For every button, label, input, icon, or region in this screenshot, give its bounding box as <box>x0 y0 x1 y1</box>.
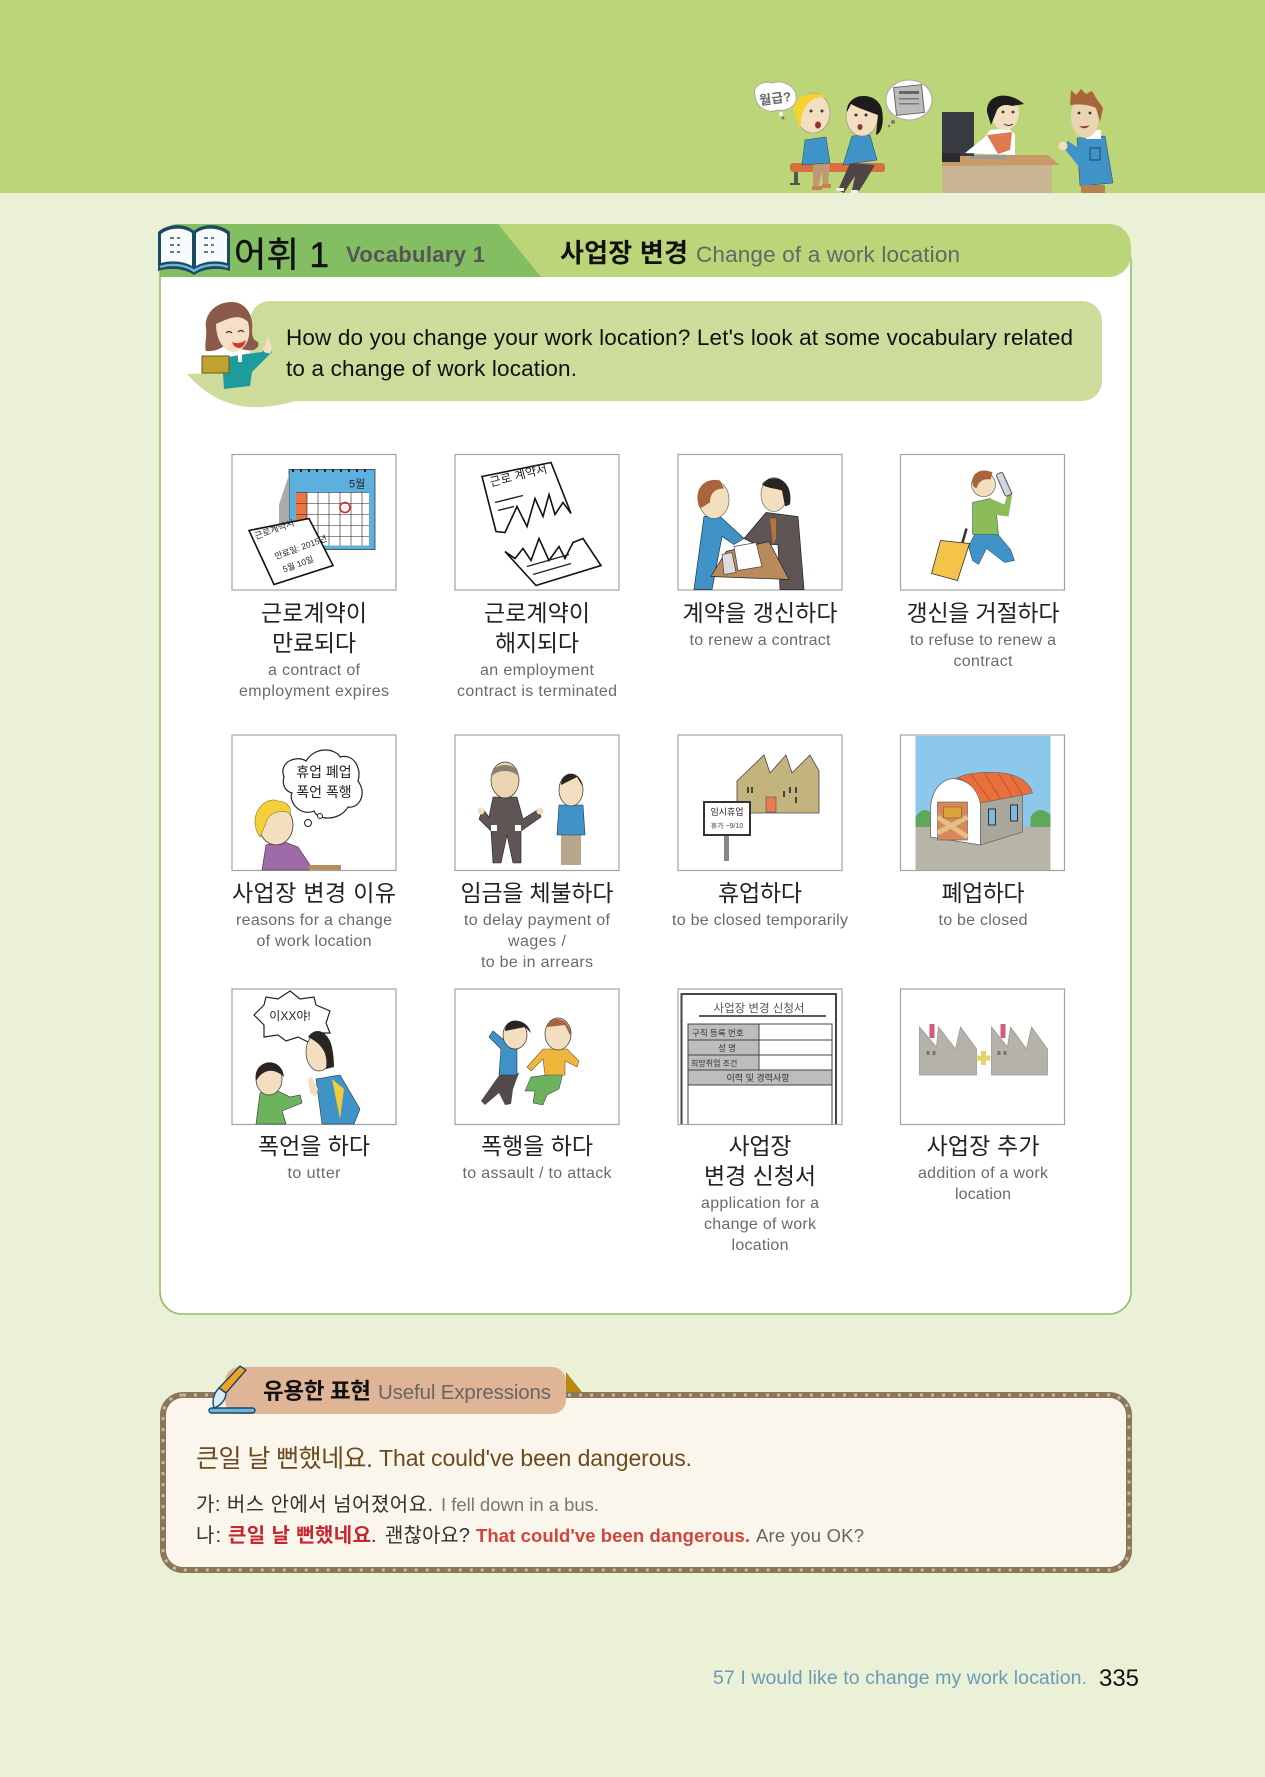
seated dark-haired worker <box>836 96 883 193</box>
dialogue line 2: 나: <box>196 1524 221 1547</box>
label <box>938 880 1028 929</box>
label: to delay payment of <box>464 912 611 929</box>
dialogue line 1: I fell down in a bus. <box>441 1494 599 1515</box>
label: 사업장 변경 이유 <box>232 880 396 906</box>
vocabulary item: delay wages <box>455 735 619 971</box>
label: 임금을 체불하다 <box>460 880 614 906</box>
picture: calendar and contract <box>232 454 396 590</box>
picture: fighting men <box>455 989 619 1124</box>
vocabulary item: renew contract <box>678 454 842 649</box>
picture: application form: 사업장 변경 신청서 <box>713 1001 805 1015</box>
vocabulary item: utter <box>232 989 396 1182</box>
picture: man thinking: 폭언 폭행 <box>296 784 352 800</box>
vocabulary item: contract expires <box>232 454 396 700</box>
tab title English: Useful Expressions <box>378 1381 551 1404</box>
label: 폭언을 하다 <box>258 1133 370 1159</box>
label: location <box>732 1237 788 1254</box>
dialogue line 2: 큰일 날 뻔했네요 <box>228 1524 371 1547</box>
picture: application form: 구직 등록 번호 <box>692 1028 744 1038</box>
label: application for a <box>701 1195 819 1212</box>
vocabulary item: addition of work location <box>900 989 1064 1203</box>
label <box>460 880 614 971</box>
speech bubble <box>187 301 1102 407</box>
seated blonde worker <box>794 93 831 190</box>
picture: man thinking <box>232 735 396 870</box>
page number: 335 <box>1099 1665 1139 1692</box>
heading: topic English: Change of a work location <box>696 242 960 267</box>
label: 근로계약이 <box>261 600 367 626</box>
picture: torn contract <box>455 454 619 590</box>
picture: application form <box>678 989 842 1124</box>
panel card <box>160 240 1131 1314</box>
label <box>672 880 848 929</box>
tab title Korean: 유용한 표현 <box>263 1379 371 1404</box>
vocabulary item: assault <box>455 989 619 1182</box>
icon: teacher <box>202 302 272 389</box>
label: 만료되다 <box>272 630 356 656</box>
picture: calendar and contract: 만료일: 2015년 <box>273 533 328 561</box>
vocabulary item: contract terminated <box>455 454 619 700</box>
panel: useful expressions <box>163 1366 1129 1570</box>
picture: torn contract: 근로 계약서 <box>488 461 549 489</box>
computer monitor <box>942 112 974 162</box>
heading: 어휘 1: 어휘 1 <box>234 236 329 275</box>
label <box>462 1133 612 1182</box>
receptionist <box>965 96 1024 155</box>
vocabulary item: reasons <box>232 735 396 950</box>
label: reasons for a change <box>236 912 392 929</box>
thought bubble: wages: 월급? <box>758 89 792 108</box>
picture: two factories and plus <box>900 989 1064 1124</box>
label: contract is terminated <box>457 683 617 700</box>
label: 계약을 갱신하다 <box>682 600 838 626</box>
picture: application form: 이력 및 경력사항 <box>727 1072 789 1083</box>
icon: open book <box>158 225 230 275</box>
label <box>258 1133 370 1182</box>
heading: topic Korean: 사업장 변경 <box>560 238 688 268</box>
heading bar <box>160 224 1131 277</box>
picture: boarded-up building <box>900 735 1064 870</box>
bubble text: How do you change your work location? Let's look at some vocabulary related <box>286 325 1073 350</box>
picture: calendar and contract: 5월 10일 <box>281 554 315 574</box>
label: 폭행을 하다 <box>481 1133 593 1159</box>
icon: paint brush <box>209 1366 255 1413</box>
picture: verbal abuse <box>232 989 396 1124</box>
label <box>701 1133 819 1254</box>
vocabulary item: closed <box>900 735 1064 929</box>
picture: verbal abuse: 이XX야! <box>269 1009 311 1023</box>
label <box>906 600 1060 670</box>
label: an employment <box>480 662 595 679</box>
male worker waving <box>1058 89 1113 193</box>
thought bubble: document <box>886 80 932 127</box>
label <box>682 600 838 649</box>
bubble text: to a change of work location. <box>286 356 577 381</box>
label <box>239 600 389 700</box>
picture: application form: 희망취업 조건 <box>691 1058 737 1068</box>
picture: calendar and contract: 5월 <box>349 478 365 490</box>
panel: vocabulary <box>158 224 1131 1314</box>
expression <box>196 1445 692 1473</box>
label: employment expires <box>239 683 389 700</box>
dialogue line 2: 괜찮아요? <box>385 1524 470 1547</box>
bubble text <box>286 325 1073 381</box>
illustration: workers at the employment center <box>755 80 1113 193</box>
heading: Vocabulary 1: Vocabulary 1 <box>346 242 485 267</box>
dialogue line 2: Are you OK? <box>756 1525 864 1546</box>
vocabulary item: application form <box>678 989 842 1254</box>
label: 휴업하다 <box>718 880 802 906</box>
label: wages / <box>507 933 567 950</box>
dialogue line 2: That could've been dangerous. <box>476 1525 750 1546</box>
label: a contract of <box>268 662 361 679</box>
dialogue line 1: 가: 버스 안에서 넘어졌어요. <box>196 1493 433 1516</box>
label: 근로계약이 <box>484 600 590 626</box>
label <box>457 600 617 700</box>
label: 사업장 <box>728 1133 792 1159</box>
label: to be in arrears <box>481 954 593 971</box>
label: 변경 신청서 <box>704 1163 816 1189</box>
tab <box>225 1367 566 1414</box>
picture: boss and worker <box>455 735 619 870</box>
tab fold <box>566 1372 582 1392</box>
picture: man thinking: 휴업 폐업 <box>296 764 352 780</box>
label: location <box>955 1186 1011 1203</box>
dialogue line 1 <box>196 1493 599 1516</box>
desk <box>942 155 1060 193</box>
picture: factory with sign: 임시휴업 <box>710 806 744 817</box>
label: to utter <box>288 1165 341 1182</box>
label: to assault / to attack <box>462 1165 612 1182</box>
dialogue line 2 <box>196 1524 864 1547</box>
expression: 큰일 날 뻔했네요. <box>196 1445 373 1473</box>
label <box>918 1133 1049 1203</box>
label: to renew a contract <box>690 632 831 649</box>
vocabulary item: closed temporarily <box>672 735 848 929</box>
vocabulary item: refuse to renew <box>900 454 1064 670</box>
label: 폐업하다 <box>942 880 1024 906</box>
label: change of work <box>704 1216 817 1233</box>
beaded frame <box>163 1395 1129 1570</box>
footer chapter title: 57 I would like to change my work location. <box>713 1667 1087 1689</box>
expression: That could've been dangerous. <box>379 1445 692 1471</box>
label: to be closed temporarily <box>672 912 848 929</box>
label: of work location <box>256 933 372 950</box>
label <box>232 880 396 950</box>
bench <box>790 163 885 185</box>
label: to refuse to renew a <box>910 632 1056 649</box>
label: 사업장 추가 <box>926 1133 1040 1159</box>
top green banner <box>0 0 1265 193</box>
label: 해지되다 <box>495 630 579 656</box>
label: contract <box>954 653 1013 670</box>
label: to be closed <box>938 912 1028 929</box>
picture: factory with sign: 휴가 ~9/10 <box>711 821 743 830</box>
label: 갱신을 거절하다 <box>906 600 1060 626</box>
picture: application form: 성 명 <box>718 1043 736 1053</box>
picture: factory with sign <box>678 735 842 870</box>
dialogue line 2: . <box>371 1525 377 1547</box>
thought bubble: wages <box>755 82 796 120</box>
picture: calendar and contract: 근로계약서 <box>253 517 296 541</box>
picture: boy with suitcase <box>900 454 1064 590</box>
picture: handshake at table <box>678 454 842 590</box>
label: addition of a work <box>918 1165 1049 1182</box>
